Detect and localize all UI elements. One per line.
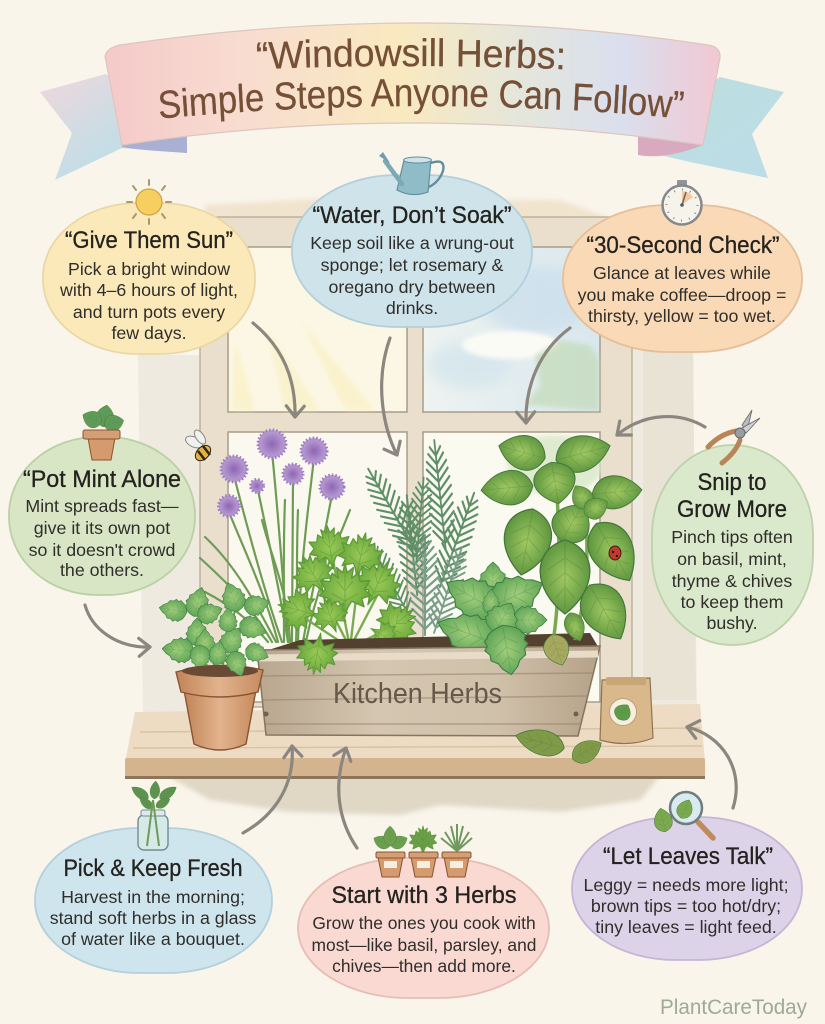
body text: you make coffee—droop =	[578, 285, 786, 305]
icon: jar of herbs	[129, 781, 179, 850]
left curtain	[138, 355, 205, 714]
tan wall wash above window	[200, 198, 640, 250]
heading: Snip to	[698, 469, 766, 496]
body text: tiny leaves = light feed.	[595, 917, 777, 937]
heading: Start with 3 Herbs	[332, 882, 516, 909]
heading: “Give Them Sun”	[65, 227, 233, 254]
body text: Leggy = needs more light;	[583, 875, 789, 895]
body text: drinks.	[386, 298, 438, 318]
icon: three herb pots	[371, 824, 472, 877]
crate label: Kitchen Herbs	[333, 678, 502, 710]
panel: Pick & Keep Fresh	[35, 828, 272, 973]
body text: Pinch tips often	[671, 527, 793, 547]
icon: watering can	[379, 152, 444, 195]
body text: bushy.	[706, 613, 758, 633]
body text: so it doesn't crowd	[29, 540, 175, 560]
bottom right pane	[423, 432, 600, 702]
right tail	[638, 77, 784, 178]
parsley overhang	[293, 630, 341, 678]
herb planter	[200, 428, 648, 736]
mint in planter	[431, 562, 551, 663]
body text: Harvest in the morning;	[61, 887, 245, 907]
rosemary	[357, 439, 486, 637]
icon: sun	[127, 180, 171, 224]
ladybug	[609, 546, 621, 560]
wooden crate	[257, 646, 600, 736]
heading: “30-Second Check”	[586, 232, 780, 259]
heading: “Pot Mint Alone	[23, 466, 181, 493]
parsley	[273, 523, 427, 656]
title: “Windowsill Herbs:	[256, 38, 563, 70]
window sill	[125, 704, 705, 779]
title	[160, 38, 684, 122]
title: Simple Steps Anyone Can Follow”	[160, 79, 684, 122]
terracotta pot	[184, 690, 256, 750]
body text: most—like basil, parsley, and	[312, 935, 536, 955]
overhanging basil leaf	[540, 631, 574, 669]
icon: pruning shears	[708, 410, 760, 463]
body text: oregano dry between	[328, 277, 496, 297]
heading: Pick & Keep Fresh	[64, 855, 242, 882]
chives	[200, 430, 350, 642]
panel: Pot Mint Alone	[9, 437, 195, 595]
left fold	[120, 130, 187, 153]
body text: chives—then add more.	[332, 956, 516, 976]
icon: stopwatch	[662, 180, 702, 224]
panel: Let Leaves Talk	[572, 817, 802, 960]
panel: Give Them Sun	[43, 203, 255, 354]
window scene	[138, 198, 697, 714]
brand watermark: PlantCareToday	[660, 996, 807, 1019]
ribbon body	[105, 23, 720, 145]
icon: small potted plant	[79, 404, 126, 460]
body text: Mint spreads fast—	[25, 496, 179, 516]
body text: and turn pots every	[73, 302, 225, 322]
panel: Water, Don't Soak	[292, 175, 532, 327]
panel: Start with 3 Herbs	[298, 858, 549, 998]
front leaf over pot rim	[223, 648, 251, 680]
body text: Keep soil like a wrung-out	[310, 233, 514, 253]
heading: “Water, Don’t Soak”	[312, 202, 512, 229]
top right pane with sky	[423, 247, 600, 412]
bottom left pane	[228, 432, 407, 702]
body text: Pick a bright window	[68, 259, 230, 279]
body text: of water like a bouquet.	[61, 929, 245, 949]
overhanging mint leaf	[481, 622, 533, 678]
shadow under sill	[168, 776, 660, 815]
panel: Snip to Grow More	[652, 445, 813, 645]
top left pane with sun rays	[228, 247, 407, 412]
basil	[480, 428, 648, 660]
heading: “Let Leaves Talk”	[603, 843, 773, 870]
arrows	[85, 323, 736, 848]
body text: on basil, mint,	[677, 549, 787, 569]
body text: sponge; let rosemary &	[321, 255, 504, 275]
heading	[677, 469, 787, 523]
body text: to keep them	[681, 592, 783, 612]
seed packet	[600, 677, 653, 744]
panel: 30-Second Check	[563, 205, 802, 352]
right fold	[638, 130, 706, 156]
window frame	[200, 217, 632, 707]
title ribbon	[40, 22, 784, 180]
planter soil	[262, 633, 600, 660]
body text: Grow the ones you cook with	[312, 913, 536, 933]
body text: thyme & chives	[672, 571, 792, 591]
icon: magnifying glass and leaf	[652, 792, 713, 838]
icon: bee	[184, 428, 214, 464]
fallen leaves	[513, 724, 606, 768]
body text: brown tips = too hot/dry;	[591, 896, 781, 916]
heading: Grow More	[677, 496, 787, 523]
body text: stand soft herbs in a glass	[50, 908, 256, 928]
left tail	[40, 74, 187, 180]
body text: thirsty, yellow = too wet.	[588, 306, 776, 326]
body text: with 4–6 hours of light,	[59, 280, 238, 300]
body text: few days.	[111, 323, 187, 343]
body text: Glance at leaves while	[593, 263, 771, 283]
body text: give it its own pot	[34, 518, 170, 538]
potted mint	[157, 579, 272, 750]
body text: the others.	[60, 560, 144, 580]
right curtain	[632, 345, 697, 712]
